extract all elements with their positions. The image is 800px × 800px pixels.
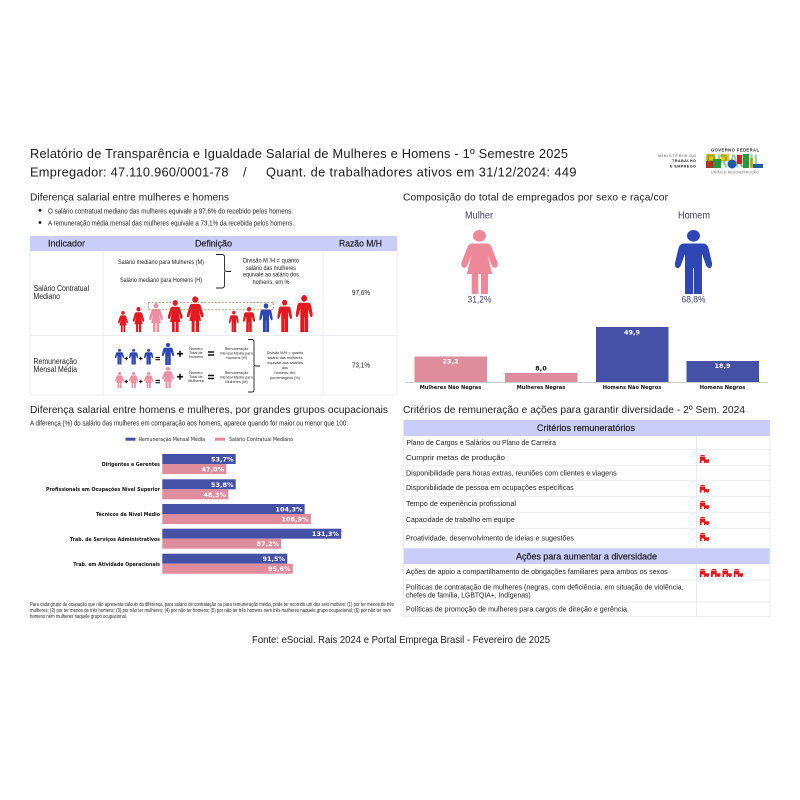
- subtitle: A diferença (%) do salário das mulheres em comparação aos homens, aparece quando for maior ou menor que 100:: [30, 418, 348, 428]
- row: contractual salary: Salário Contratual: [34, 284, 89, 293]
- table: criteria: Proatividade, desenvolvimento de ideias e sugestões: [406, 533, 574, 542]
- icon: man 68,8%: Homem: [678, 210, 710, 222]
- logos: ministry and federal government: UNIÃO E RECONSTRUÇÃO: [711, 170, 759, 174]
- bullet list: O salário contratual mediano das mulheres equivale a 97,6% do recebido pelos homens.: [48, 208, 293, 216]
- icon: woman 31,2%: 31,2%: [468, 294, 492, 304]
- bar chart: occupational groups: Dirigentes e Gerentes: [102, 462, 160, 468]
- table: indicators: Indicador: [48, 238, 85, 248]
- bar chart: occupational groups: 53,8%: [211, 481, 234, 489]
- row: monthly average pay: Mensal Média para: [220, 352, 254, 356]
- footnote: Para cada grupo de ocupação que não apresenta cálculo da diferença, para salário de contratação ou para remuneração média, pode ter ocorrido um dos seis motivos: (1) por ter menos de três: [30, 602, 394, 608]
- footnote: [30, 602, 394, 620]
- bullet list: A remuneração média mensal das mulheres equivale a 73,1% da recebida pelos homens.: [48, 220, 294, 228]
- footnote: mulheres; (2) por ter menos de três homens; (3) por não ter mulheres; (4) por não ter homens; (5) por não ter três homens nem três mulheres naquele grupo ocupacional; (6) por não ter nem: [30, 608, 391, 614]
- bar chart: occupational groups: Técnicos de Nível Médio: [96, 511, 160, 518]
- bar chart: occupational groups: 108,9%: [281, 516, 309, 524]
- bar chart: race and sex: 18,9: [714, 362, 731, 370]
- icon: man 68,8%: 68,8%: [682, 294, 706, 304]
- row: monthly average pay: homens, em: [275, 371, 295, 375]
- title: Relatório de Transparência e Igualdade Salarial de Mulheres e Homens - 1º Semestre 2025: [30, 146, 568, 161]
- table: criteria: Cumprir metas de produção: [406, 453, 505, 462]
- bar chart: occupational groups: Trab. de Serviços Administrativos: [70, 537, 160, 543]
- bar chart: occupational groups: Profissionais em Ocupações Nível Superior: [46, 486, 160, 493]
- bar chart: occupational groups: [46, 454, 341, 574]
- table: criteria: chefes de família, LGBTQIA+, Indígenas): [406, 590, 531, 599]
- footnote: homens nem mulheres naquele grupo ocupacional.: [30, 614, 127, 620]
- legend: Remuneração Mensal Média: [139, 436, 205, 443]
- employer information: [30, 164, 576, 180]
- row: monthly average pay: porcentagens (%): [270, 376, 301, 380]
- row: monthly average pay: Mulheres: [188, 379, 204, 383]
- row: monthly average pay: Divisão M/H = quanto: [267, 351, 303, 355]
- table: indicators: Definição: [195, 238, 232, 248]
- employer information: Quant. de trabalhadores ativos em 31/12/2024: 449: [266, 164, 576, 180]
- row: monthly average pay: Remuneração: [225, 347, 248, 351]
- icons: men equation: [115, 343, 174, 365]
- table: criteria: Critérios remuneratórios: [537, 423, 636, 433]
- icon: woman 31,2%: [461, 210, 498, 304]
- table: criteria: Disponibilidade para horas extras, reuniões com clientes e viagens: [406, 468, 617, 477]
- table: criteria: Disponibilidade de pessoa em ocupações específicas: [406, 483, 574, 492]
- row: contractual salary: Mediano: [34, 292, 60, 301]
- table: criteria: Ações para aumentar a diversidade: [516, 552, 657, 562]
- bar chart: race and sex: 8,0: [535, 364, 547, 372]
- heading: salary difference: Diferença salarial entre mulheres e homens: [30, 192, 229, 204]
- row: monthly average pay: Mensal Média: [34, 365, 77, 374]
- employer information: Empregador: 47.110.960/0001-78: [30, 164, 228, 180]
- row: monthly average pay: Mensal Média para: [220, 376, 254, 380]
- employer information: /: [243, 164, 247, 180]
- row: monthly average pay: Remuneração: [34, 357, 77, 366]
- bar chart: occupational groups: 91,5%: [262, 555, 285, 563]
- table: criteria: Políticas de promoção de mulheres para cargos de direção e gerência: [406, 605, 628, 614]
- row: monthly average pay: Número: [189, 371, 203, 375]
- row: monthly average pay: Homens: [189, 355, 203, 359]
- table: criteria: [404, 420, 770, 617]
- bar chart: race and sex: Mulheres Negras: [517, 385, 565, 391]
- row: monthly average pay: Remuneração: [225, 371, 248, 375]
- bar chart: occupational groups: 53,7%: [211, 456, 234, 464]
- row: monthly average pay: Mulheres (M): [225, 380, 248, 384]
- icons: women ordered by salary: [118, 296, 204, 332]
- row: contractual salary: salário das mulheres: [246, 265, 297, 272]
- legend: Salário Contratual Mediano: [229, 436, 293, 443]
- bar chart: race and sex: Homens Negros: [700, 385, 745, 391]
- row: contractual salary: Salário mediano para Homens (H): [120, 277, 202, 284]
- table: indicators: [30, 236, 397, 395]
- row: contractual salary: homens, em %: [252, 279, 290, 286]
- bar chart: race and sex: 23,2: [442, 358, 459, 366]
- title: [30, 146, 576, 180]
- panel: composition by sex and race: [403, 192, 768, 391]
- heading: criteria: Critérios de remuneração e ações para garantir diversidade - 2º Sem. 2024: [403, 405, 745, 416]
- logos: ministry and federal government: GOVERNO FEDERAL: [711, 148, 759, 152]
- icons: red marks: [700, 455, 743, 577]
- bar chart: occupational groups: 131,3%: [312, 530, 339, 538]
- logos: ministry and federal government: E EMPREGO: [670, 164, 696, 168]
- logos: ministry and federal government: [658, 148, 763, 174]
- row: monthly average pay: Homens (H): [226, 356, 247, 360]
- row: contractual salary: [34, 254, 370, 332]
- row: monthly average pay: Total de: [189, 351, 203, 355]
- table: indicators: Razão M/H: [339, 238, 382, 248]
- bar chart: occupational groups: 104,3%: [275, 506, 303, 514]
- row: monthly average pay: dos: [282, 366, 288, 370]
- heading: occupational groups: Diferença salarial entre homens e mulheres, por grandes grupos ocupacionais: [30, 405, 388, 416]
- panel: remuneration criteria and diversity actions: [403, 405, 770, 617]
- source note: Fonte: eSocial. Rais 2024 e Portal Emprega Brasil - Fevereiro de 2025: [252, 634, 550, 646]
- icon: woman 31,2%: Mulher: [465, 210, 494, 222]
- row: contractual salary: Salário mediano para Mulheres (M): [118, 259, 204, 266]
- table: criteria: Capacidade de trabalho em equipe: [406, 515, 515, 524]
- table: criteria: Políticas de contratação de mulheres (negras, com deficiência, em situação de violência,: [406, 583, 684, 592]
- table: criteria: Ações de apoio a compartilhamento de obrigações familiares para ambos os sexos: [406, 567, 668, 576]
- logos: ministry and federal government: MINISTÉRIO DO: [658, 153, 696, 158]
- row: monthly average pay: equivale aos salários: [267, 361, 303, 365]
- icon: man 68,8%: [675, 210, 712, 304]
- icons: men ordered by salary: [229, 295, 313, 332]
- bar chart: occupational groups: 47,0%: [201, 466, 224, 474]
- bar chart: race and sex: [405, 327, 768, 391]
- table: criteria: Plano de Cargos e Salários ou Plano de Carreira: [406, 438, 557, 447]
- bar chart: race and sex: Mulheres Não Negras: [420, 385, 481, 391]
- table: criteria: Tempo de experiência profissional: [406, 499, 516, 508]
- row: contractual salary: Divisão M /H = quanto: [243, 258, 299, 264]
- panel: difference by occupational group: [30, 405, 394, 620]
- bar chart: occupational groups: Trab. em Atividade Operacionais: [73, 562, 160, 568]
- row: monthly average pay: Número: [189, 347, 203, 351]
- legend: [126, 436, 293, 443]
- row: monthly average pay: salário das mulheres: [267, 356, 303, 360]
- bar chart: race and sex: Homens Não Negros: [603, 385, 661, 391]
- logos: ministry and federal government: BRASIL: [706, 152, 763, 172]
- row: contractual salary: equivale ao salário dos: [243, 272, 300, 278]
- heading: composition: Composição do total de empregados por sexo e raça/cor: [403, 192, 669, 204]
- row: monthly average pay: [34, 340, 370, 392]
- icons: women equation: [115, 367, 174, 388]
- bar chart: occupational groups: 48,3%: [203, 491, 226, 499]
- bar chart: occupational groups: 95,6%: [268, 565, 291, 573]
- panel: salary difference between women and men: [30, 192, 397, 395]
- row: monthly average pay: 73,1%: [352, 361, 370, 370]
- bar chart: race and sex: 49,9: [624, 328, 640, 336]
- row: monthly average pay: Total de: [189, 375, 203, 379]
- row: contractual salary: 97,6%: [352, 288, 370, 297]
- logos: ministry and federal government: TRABALHO: [672, 159, 696, 163]
- bar chart: occupational groups: 87,2%: [256, 540, 279, 548]
- bullet list: [39, 208, 294, 228]
